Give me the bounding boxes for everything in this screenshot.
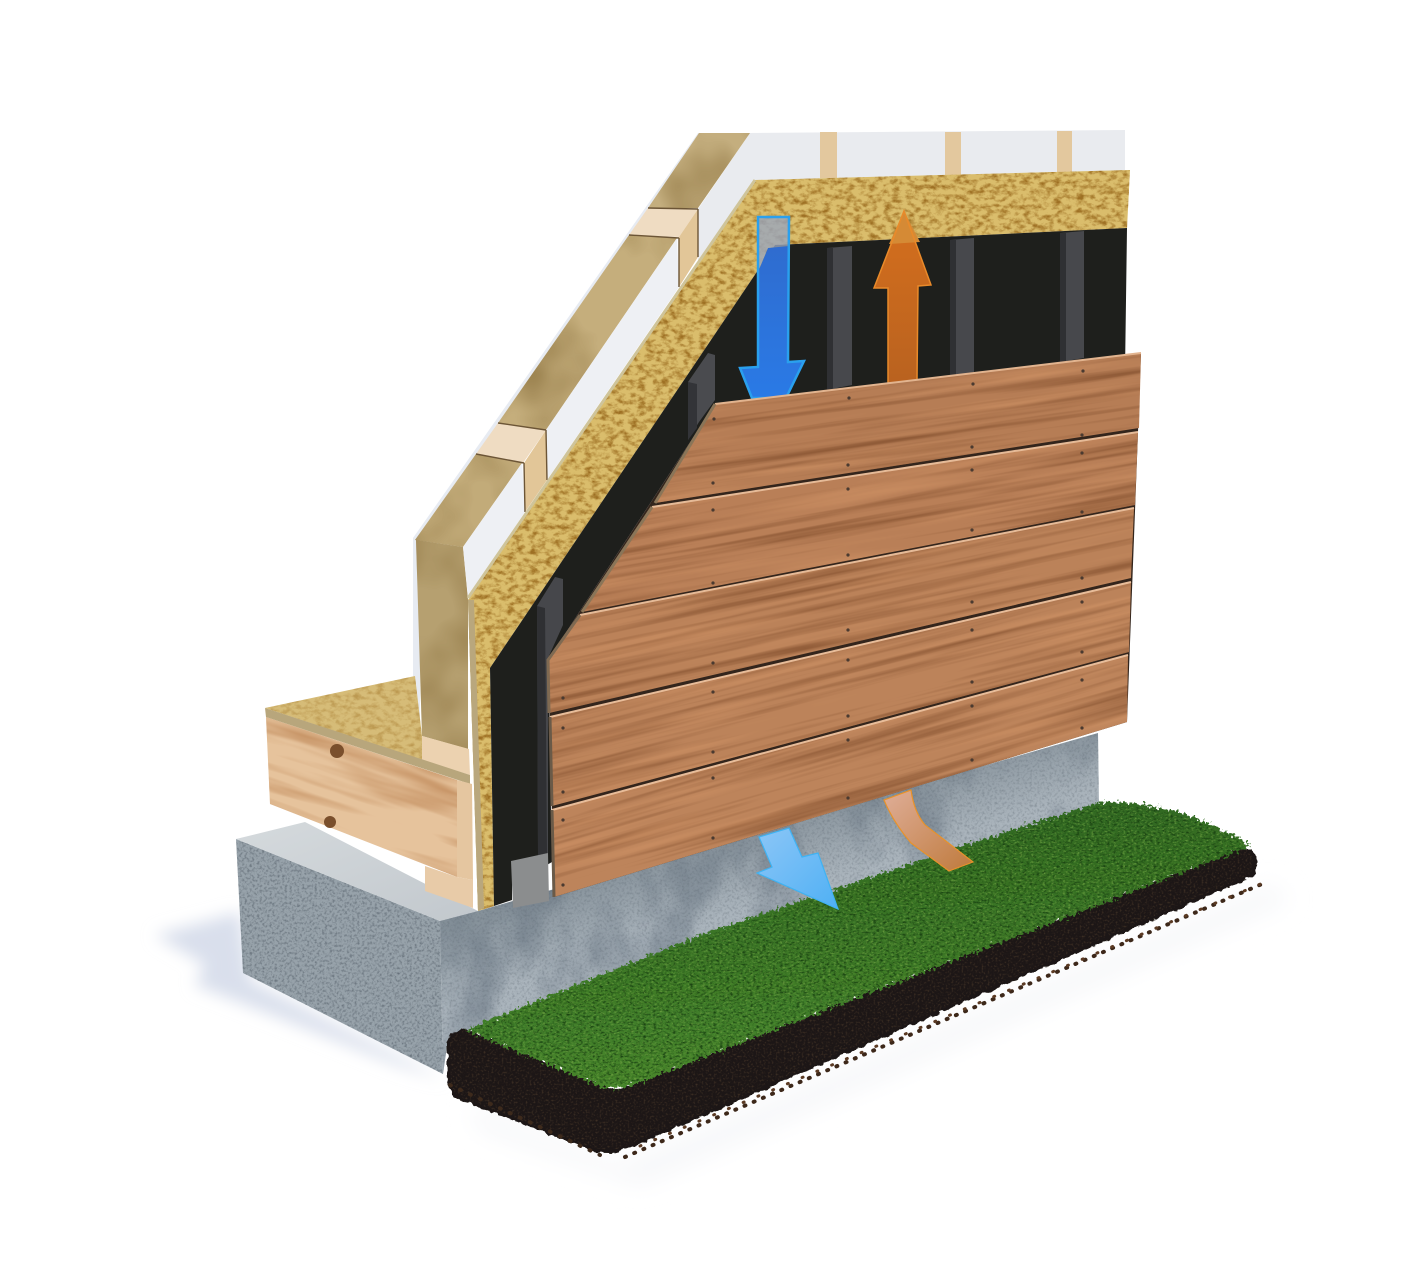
- top studs: [820, 131, 1072, 178]
- insect mesh: [511, 853, 549, 908]
- insulation batt middle: [498, 235, 677, 430]
- OSB cut edge: [468, 600, 484, 911]
- outer sheet edge: [413, 133, 702, 752]
- light blue outgoing air arrow: [757, 828, 838, 909]
- concrete right face: [440, 733, 1099, 1074]
- screws: [561, 369, 1085, 887]
- OSB sheathing: [468, 170, 1130, 911]
- soil bed: [447, 848, 1270, 1157]
- floor OSB edge: [265, 708, 470, 784]
- illustration: ventilated timber wall cross-section: [159, 130, 1262, 1160]
- wood cladding boards: [546, 352, 1142, 897]
- ground shadow: [155, 885, 1290, 1185]
- insulation texture: [415, 133, 750, 749]
- concrete foundation: [236, 733, 1099, 1074]
- insulation batt lower: [415, 454, 522, 547]
- board 1: [656, 352, 1142, 503]
- board 2: [584, 431, 1138, 612]
- concrete left face: [236, 839, 443, 1074]
- orange upward air arrow: [874, 211, 931, 384]
- board 5: [552, 654, 1128, 896]
- grass: [465, 802, 1251, 1088]
- vertical battens: [827, 231, 1084, 390]
- floor OSB top: [265, 676, 422, 760]
- knot: [330, 744, 344, 758]
- diagonal cut battens: [537, 353, 715, 855]
- insulation batt top: [648, 133, 750, 208]
- blue downward air arrow: [740, 217, 804, 398]
- rim joist: [457, 780, 473, 880]
- floor joist: [266, 717, 457, 877]
- white membrane backing: [698, 130, 1125, 262]
- insulation layer: [415, 133, 750, 749]
- knot: [324, 816, 336, 828]
- white strips between studs: [463, 238, 679, 598]
- sole block: [425, 866, 473, 908]
- wood studs in section: [422, 208, 698, 775]
- board 3: [546, 507, 1134, 713]
- insulation front face: [416, 540, 468, 749]
- concrete top face: [236, 822, 478, 921]
- soil crumbs: [450, 880, 1270, 1157]
- board gap shadow: [548, 353, 1141, 897]
- board left end edges: [550, 404, 715, 897]
- black membrane: [490, 228, 1127, 906]
- board 4: [550, 581, 1132, 806]
- copper incoming air ribbon: [884, 790, 973, 871]
